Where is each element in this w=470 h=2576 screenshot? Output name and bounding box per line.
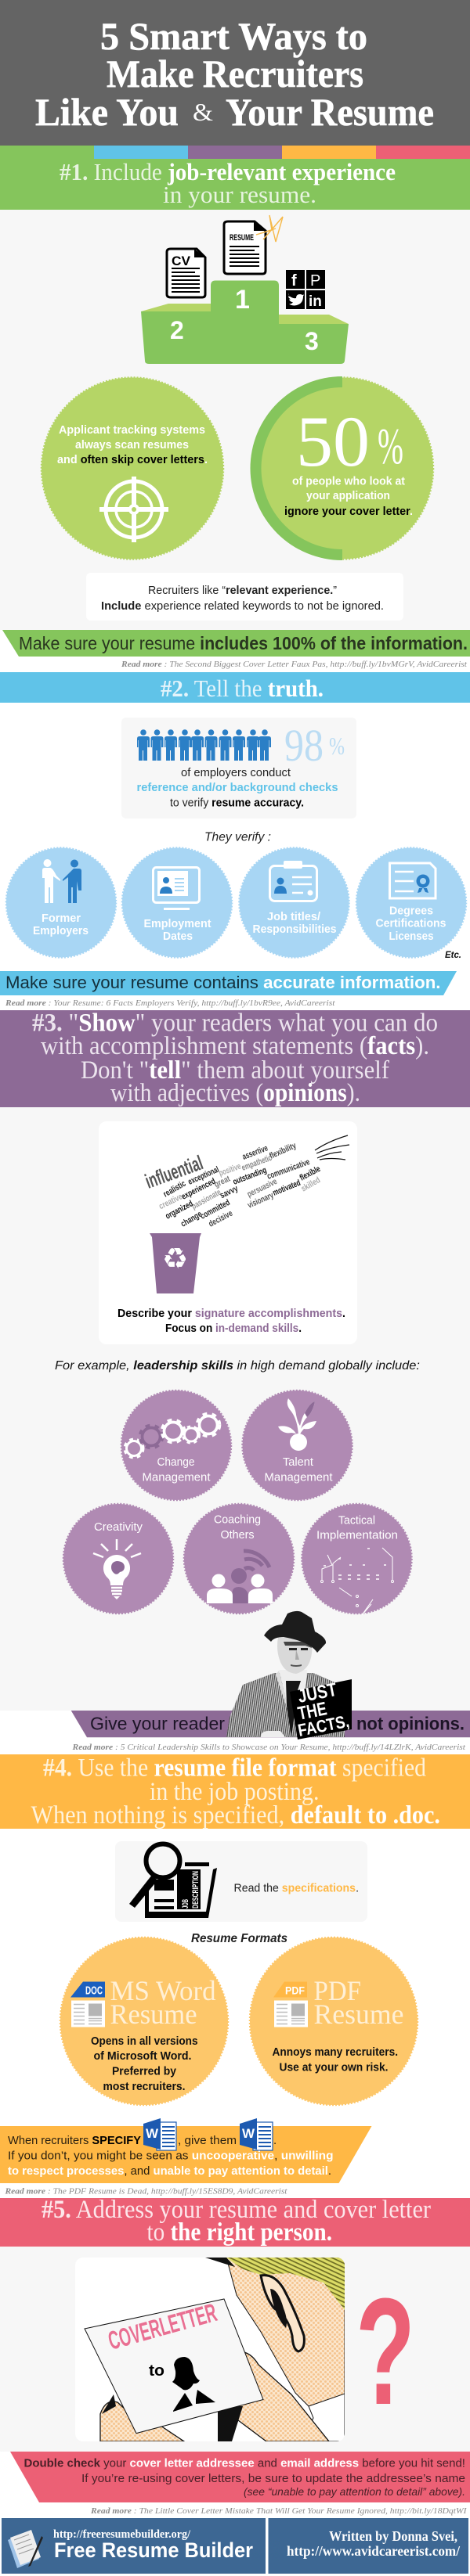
- title line 3: Your Resume: [226, 90, 434, 134]
- podium numbers: 1: [235, 285, 250, 315]
- ribbon: section 4 takeaway: If you don’t, you might be seen as uncooperative, unwilling: [8, 2149, 334, 2163]
- section 1 heading: [0, 158, 470, 210]
- icon: resume document: [224, 221, 266, 274]
- circle: employment dates: Dates: [163, 930, 193, 943]
- illustration: comic man holding cover letter: [75, 2258, 345, 2441]
- ribbon: section 3 takeaway: Give your reader: [90, 1714, 225, 1734]
- icon: magnifier over job description: JOB: [181, 1899, 190, 1909]
- cover letter card: COVERLETTER: [105, 2297, 220, 2355]
- panel: 98 percent stat: %: [329, 732, 345, 760]
- section 3 heading: [0, 1009, 470, 1107]
- panel: recruiters like relevant experience: Include experience related keywords to not be ignored.: [101, 599, 384, 613]
- icon: document and pen: [8, 2530, 43, 2568]
- circle: PDF resume: Annoys many recruiters.: [273, 2045, 398, 2059]
- word cloud of adjectives: change: [179, 1210, 204, 1229]
- word cloud of adjectives: visionary: [246, 1190, 276, 1211]
- ribbon: section 3 takeaway: not opinions.: [356, 1714, 465, 1734]
- icon: lightbulb brain: [93, 1539, 141, 1599]
- ribbon: section 4 takeaway: to respect processes, and unable to pay attention to detail.: [8, 2164, 331, 2178]
- word cloud of adjectives: positive: [218, 1162, 242, 1178]
- title line 3: Like You: [35, 90, 179, 134]
- circle: MS Word resume: Resume: [110, 1999, 197, 2030]
- word cloud of adjectives: experienced: [180, 1177, 217, 1202]
- footer: free resume builder: Free Resume Builder: [54, 2538, 253, 2562]
- circle: tactical implementation: Implementation: [316, 1529, 398, 1542]
- section 3 heading: with accomplishment statements (facts).: [41, 1032, 429, 1060]
- word cloud of adjectives: decisive: [207, 1209, 234, 1229]
- circle: MS Word resume: of Microsoft Word.: [94, 2049, 191, 2063]
- word cloud of adjectives: persuasive: [246, 1177, 279, 1200]
- icon: magnifier over job description: DESCRIPTION: [191, 1871, 201, 1909]
- circle: change management: [121, 1391, 231, 1500]
- title line 3: &: [193, 98, 213, 126]
- section 2 heading: [0, 672, 470, 703]
- section 2 heading: #2. Tell the truth.: [161, 675, 324, 702]
- read more 5: Read more : The Little Cover Letter Mistake That Will Get Your Resume Ignored, http://bit.ly/18DqtWI: [90, 2506, 468, 2516]
- panel: describe signature accomplishments: Describe your signature accomplishments.: [118, 1307, 345, 1320]
- word cloud of adjectives: committed: [199, 1198, 232, 1221]
- circle: degrees certifications licenses: Certifications: [376, 917, 446, 930]
- section 3 heading: Don't "tell" them about yourself: [81, 1056, 389, 1085]
- icon: word: [143, 2118, 176, 2150]
- icon: magnifier over job description: [129, 1844, 217, 1918]
- ribbon: section 5 takeaway: Double check your cover letter addressee and email address before you hit send!: [24, 2457, 465, 2470]
- icon: group with signal: [207, 1551, 273, 1603]
- ribbon: section 2 takeaway: Make sure your resume contains accurate information.: [5, 973, 440, 992]
- icon: social squares: f: [291, 272, 297, 290]
- circle: former employers: Former: [42, 912, 81, 925]
- panel: 98 percent stat: [121, 718, 356, 818]
- icon: word second: [240, 2118, 273, 2150]
- circle: MS Word resume: most recruiters.: [103, 2080, 185, 2093]
- cover letter card: [85, 2297, 263, 2434]
- circle: change management: Management: [143, 1471, 211, 1484]
- panel: describe signature accomplishments: Focus on in-demand skills.: [165, 1322, 302, 1335]
- word cloud of adjectives: flexibility: [268, 1141, 298, 1161]
- icon: monitor profile: [154, 867, 199, 910]
- panel: 98 percent stat: to verify resume accuracy.: [170, 797, 304, 809]
- podium: 3: [305, 327, 319, 355]
- icon: social squares: [286, 270, 325, 310]
- circle: 50 percent: %: [378, 418, 403, 475]
- circle: creativity: [63, 1504, 173, 1614]
- word cloud of adjectives: motivated: [272, 1178, 302, 1198]
- icon: word: W: [146, 2126, 159, 2141]
- book: just the facts: JUST: [296, 1679, 338, 1707]
- circle: change management: Change: [157, 1455, 194, 1469]
- icon: doc file: DOC: [85, 1984, 103, 1997]
- ribbon: section 3 takeaway: [71, 1711, 470, 1737]
- word cloud of adjectives: assertive: [241, 1143, 269, 1162]
- section 4 heading: in the job posting.: [150, 1778, 320, 1806]
- circle: coaching others: [184, 1504, 294, 1614]
- ribbon: section 4 takeaway: [0, 2118, 371, 2183]
- color stripe: [0, 146, 470, 159]
- circle: PDF resume: Resume: [313, 1999, 404, 2030]
- word cloud of adjectives: outstanding: [232, 1165, 268, 1187]
- silhouette: [172, 2357, 215, 2412]
- circle: 50 percent: your application: [306, 489, 390, 502]
- read more 4: Read more : The PDF Resume is Dead, http://buff.ly/15ES8D9, AvidCareerist: [4, 2186, 287, 2196]
- word cloud of adjectives: influential: [142, 1150, 206, 1193]
- icon: recycle bin: ♻: [162, 1242, 188, 1275]
- 98 percent: 98: [284, 720, 324, 771]
- section 5 heading: [0, 2196, 470, 2247]
- circle: 50 percent: ignore your cover letter.: [284, 505, 413, 518]
- book: just the facts: THE: [296, 1698, 328, 1725]
- icon: gears: [125, 1414, 219, 1458]
- circle: talent management: [243, 1391, 352, 1500]
- circle: employment dates: Employment: [144, 917, 212, 930]
- question mark: ?: [356, 2267, 415, 2437]
- illustration: man holding just the facts: [226, 1611, 352, 1740]
- icon: word second: W: [242, 2126, 255, 2141]
- panel: describe signature accomplishments: [99, 1121, 357, 1344]
- ribbon: section 5 takeaway: [10, 2452, 470, 2502]
- icon: star scribble: [256, 215, 283, 242]
- footer: free resume builder: [2, 2518, 266, 2574]
- ribbon: section 4 takeaway: When recruiters SPECIFY: [8, 2134, 141, 2147]
- read more 2: Read more : Your Resume: 6 Facts Employers Verify, http://buff.ly/1bvR9ee, AvidCareerist: [5, 998, 335, 1008]
- circle: former employers: [6, 848, 116, 958]
- section 5 heading: to the right person.: [147, 2218, 332, 2247]
- big number: 50: [296, 401, 370, 481]
- icon: pdf file: PDF: [285, 1984, 305, 1997]
- title line 3: [35, 90, 434, 134]
- icon: social squares: P: [310, 272, 320, 290]
- word cloud of adjectives: empathetic: [240, 1153, 273, 1173]
- icon: doc file: [70, 1981, 105, 2027]
- podium: [141, 280, 349, 364]
- word cloud of adjectives: communicative: [266, 1157, 311, 1182]
- circle: MS Word resume: Preferred by: [112, 2064, 177, 2078]
- panel: recruiters like relevant experience: Recruiters like “relevant experience.”: [148, 584, 337, 597]
- circle: PDF resume: Use at your own risk.: [279, 2061, 389, 2074]
- word cloud of adjectives: creative: [157, 1192, 184, 1211]
- circle: creativity: Creativity: [94, 1520, 143, 1534]
- circle: employment dates: [122, 848, 232, 958]
- people pictogram: [137, 729, 271, 761]
- word cloud of adjectives: savvy: [219, 1184, 240, 1200]
- book: just the facts: [290, 1679, 352, 1740]
- icon: id badge: [269, 861, 316, 901]
- circle: applicant tracking: always scan resumes: [75, 438, 189, 452]
- circle: tactical implementation: Tactical: [338, 1513, 375, 1527]
- circle: job titles: Responsibilities: [252, 923, 337, 936]
- section 1 heading: #1. Include job-relevant experience: [60, 158, 396, 185]
- icon: playbook: [321, 1548, 393, 1615]
- circle: tactical implementation: [302, 1504, 412, 1615]
- circle: job titles: [240, 848, 349, 958]
- footer: author credit: http://www.avidcareerist.com/: [287, 2543, 461, 2559]
- title line 1: 5 Smart Ways to: [100, 14, 367, 58]
- icon: CV document: [167, 249, 205, 297]
- circle: talent management: Management: [265, 1471, 333, 1484]
- section 1 heading: in your resume.: [163, 181, 316, 208]
- title line 2: Make Recruiters: [107, 52, 363, 95]
- title header: [0, 0, 470, 146]
- read more 3: Read more : 5 Critical Leadership Skills to Showcase on Your Resume, http://buff.ly/14LZlrK, AvidCareerist: [71, 1743, 466, 1752]
- icon: certificate: [390, 863, 436, 898]
- podium: 2: [170, 316, 184, 344]
- icon: social squares: in: [309, 293, 322, 310]
- book: just the facts: FACTS,: [296, 1711, 351, 1740]
- cover letter card: to: [149, 2362, 164, 2380]
- word cloud of adjectives: passionate: [190, 1188, 222, 1211]
- circle: PDF resume: PDF: [313, 1975, 361, 2006]
- icon: handshake: [42, 859, 81, 903]
- speed lines: [315, 1135, 349, 1160]
- panel: 98 percent stat: reference and/or background checks: [136, 781, 338, 794]
- footer: author credit: Written by Donna Svei,: [329, 2528, 457, 2544]
- section 4 heading: #4. Use the resume file format specified: [43, 1754, 426, 1783]
- ribbon: section 5 takeaway: (see “unable to pay attention to detail” above).: [244, 2485, 465, 2498]
- circle: coaching others: Others: [221, 1528, 254, 1542]
- footer: free resume builder: http://freeresumebuilder.org/: [53, 2528, 191, 2541]
- section 4 heading: [0, 1754, 470, 1829]
- word cloud of adjectives: great: [213, 1174, 232, 1189]
- resume formats label: Resume Formats: [191, 1932, 287, 1945]
- word cloud of adjectives: flexible: [298, 1164, 322, 1183]
- leadership intro line: For example, leadership skills in high demand globally include:: [55, 1359, 420, 1373]
- ribbon: section 4 takeaway: , give them: [178, 2134, 237, 2147]
- section 4 heading: When nothing is specified, default to .doc.: [31, 1801, 440, 1829]
- ribbon: section 4 takeaway: .: [273, 2134, 277, 2147]
- word cloud of adjectives: skilled: [299, 1175, 322, 1194]
- icon: plant: [278, 1398, 316, 1451]
- panel: recruiters like relevant experience: [86, 573, 403, 621]
- they verify label: They verify :: [204, 831, 271, 844]
- circle: 50 percent: [251, 376, 433, 560]
- circle: former employers: Employers: [33, 924, 89, 937]
- panel: read the specifications: [115, 1841, 367, 1922]
- word cloud of adjectives: organized: [164, 1199, 194, 1221]
- icon: CV document: CV: [172, 254, 191, 268]
- circle: MS Word resume: [60, 1937, 228, 2105]
- word cloud of adjectives: [142, 1141, 322, 1229]
- icon: recycle bin: [150, 1233, 201, 1293]
- circle: job titles: Job titles/: [267, 910, 321, 923]
- circle: PDF resume: [250, 1937, 418, 2105]
- word cloud of adjectives: realistic: [161, 1179, 187, 1200]
- footer: author credit: [268, 2518, 468, 2574]
- etc note: Etc.: [445, 949, 461, 960]
- circle: degrees certifications licenses: [356, 848, 466, 958]
- panel: 98 percent stat: of employers conduct: [181, 766, 291, 779]
- icon: target: [99, 477, 168, 542]
- circle: MS Word resume: Opens in all versions: [91, 2035, 197, 2048]
- circle: 50 percent: of people who look at: [292, 474, 405, 488]
- panel: read the specifications: Read the specifications.: [233, 1881, 359, 1895]
- ribbon: section 5 takeaway: If you’re re-using cover letters, be sure to update the addressee’s name: [81, 2472, 465, 2485]
- read more 1: Read more : The Second Biggest Cover Letter Faux Pas, http://buff.ly/1bvMGrV, AvidCareerist: [121, 660, 468, 669]
- circle: coaching others: Coaching: [214, 1513, 261, 1526]
- section 3 heading: #3. "Show" your readers what you can do: [32, 1009, 438, 1038]
- circle: talent management: Talent: [283, 1455, 314, 1469]
- circle: degrees certifications licenses: Degrees: [389, 905, 433, 917]
- circle: applicant tracking: Applicant tracking systems: [59, 423, 205, 437]
- word cloud of adjectives: exceptional: [186, 1165, 221, 1187]
- circle: MS Word resume: MS Word: [110, 1975, 216, 2006]
- section 3 heading: with adjectives (opinions).: [110, 1079, 360, 1107]
- circle: applicant tracking: [42, 377, 223, 559]
- circle: applicant tracking: and often skip cover letters.: [57, 453, 208, 466]
- icon: resume document: RESUME: [230, 233, 254, 243]
- circle: degrees certifications licenses: Licenses: [389, 930, 434, 943]
- section 5 heading: #5. Address your resume and cover letter: [42, 2196, 431, 2224]
- icon: pdf file: [273, 1981, 308, 2027]
